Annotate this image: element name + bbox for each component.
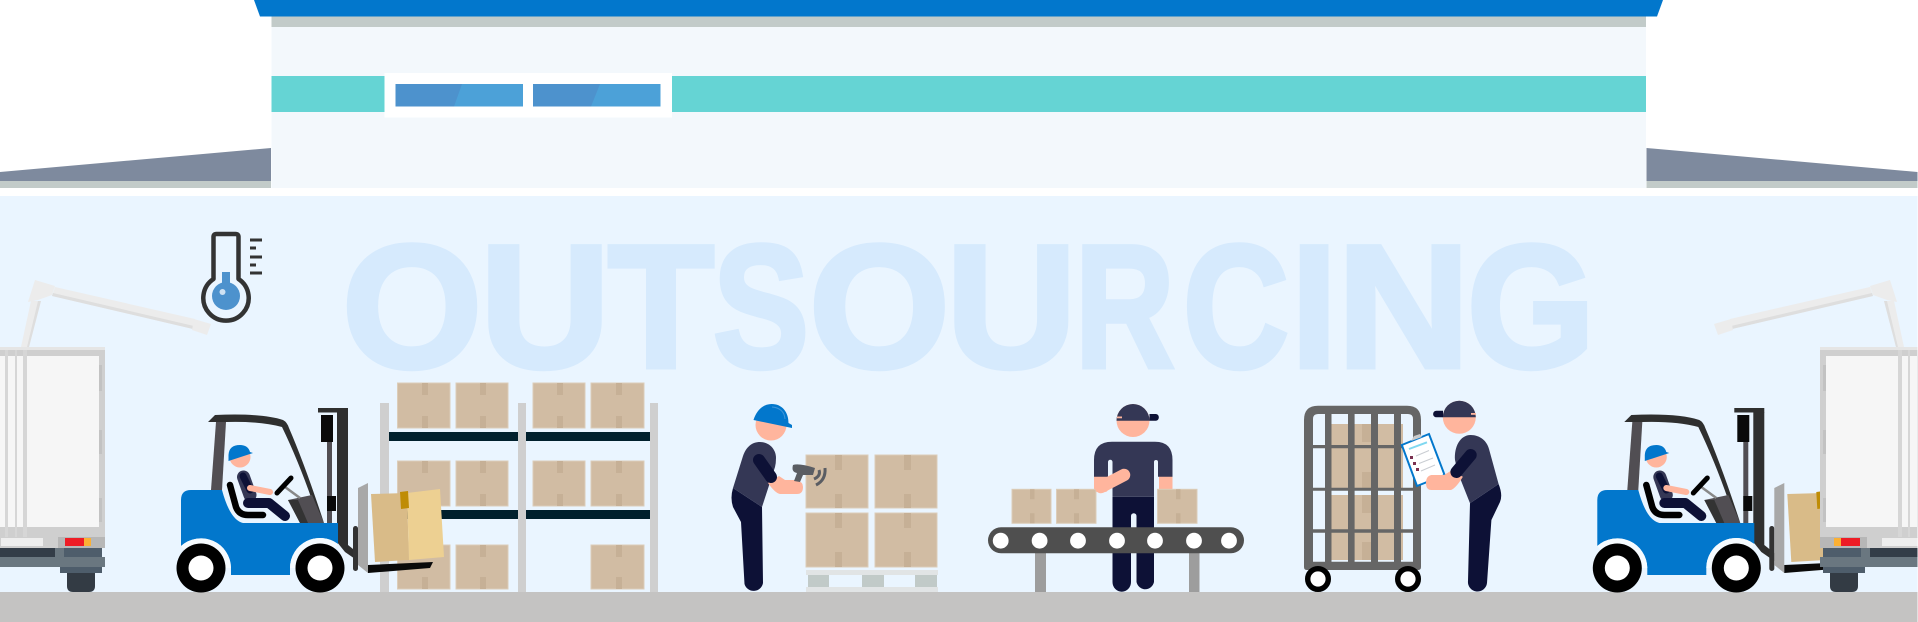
title: OUTSOURCING watermark: C <box>1183 210 1289 404</box>
wooden pallet <box>806 570 938 592</box>
conveyor boxes <box>1012 489 1197 523</box>
title: OUTSOURCING watermark: R <box>1074 210 1174 404</box>
cab frame <box>208 415 324 523</box>
driver <box>228 445 285 516</box>
floor <box>0 592 1918 622</box>
teal stripe left <box>272 76 384 112</box>
title: OUTSOURCING watermark: T <box>608 210 714 404</box>
roll cage trolley <box>1304 406 1421 589</box>
conveyor belt <box>988 527 1244 553</box>
cage wheels <box>1308 569 1418 589</box>
conveyor worker and belt <box>988 404 1244 592</box>
truck box <box>0 347 105 548</box>
conveyor legs <box>1035 553 1200 592</box>
head and cap <box>1433 401 1476 434</box>
truck: right rear view with dock light <box>1714 280 1918 592</box>
title: OUTSOURCING watermark: U <box>946 210 1077 404</box>
arm <box>759 460 803 494</box>
cage boxes <box>1332 424 1403 560</box>
box tape <box>422 383 622 589</box>
storage rack with boxes <box>380 383 658 592</box>
pallet with boxes <box>806 455 938 592</box>
torso <box>733 442 776 507</box>
wheel arches <box>181 538 338 568</box>
worker left arm and head <box>1101 404 1159 487</box>
cage frame <box>1304 406 1421 570</box>
rack uprights <box>380 403 658 592</box>
worker with barcode scanner <box>732 404 803 591</box>
blue roof <box>254 0 1663 16</box>
truck rear lights and bumper <box>0 537 105 592</box>
legs <box>732 488 763 591</box>
page edge <box>1918 188 1919 622</box>
title: OUTSOURCING watermark: G <box>1467 210 1595 404</box>
icon: thermometer <box>203 234 262 321</box>
window right <box>533 84 660 106</box>
dock light arm <box>21 280 211 347</box>
title: OUTSOURCING watermark: O <box>809 210 950 404</box>
pallet boxes <box>806 455 937 567</box>
title: OUTSOURCING watermark: I <box>1290 210 1337 404</box>
pallet box tape <box>835 455 911 567</box>
warehouse interior wall <box>0 196 1918 592</box>
conveyor rollers <box>993 533 1237 549</box>
front and rear wheels <box>176 544 344 592</box>
fascia band <box>272 16 1646 27</box>
seat <box>230 485 263 515</box>
title: OUTSOURCING watermark <box>342 210 1595 404</box>
title: OUTSOURCING watermark: N <box>1337 210 1470 404</box>
rack beams <box>389 432 658 519</box>
forklift body <box>181 490 338 575</box>
head and hard hat <box>754 404 792 440</box>
torso <box>1455 435 1499 503</box>
carried cardboard box <box>371 489 444 562</box>
steering wheel <box>277 478 300 498</box>
truck: left rear view with dock light <box>0 280 211 592</box>
arm <box>1426 455 1471 490</box>
forklift left <box>176 408 444 592</box>
clipboard <box>1402 434 1445 486</box>
teal stripe right <box>672 76 1646 112</box>
forklift right <box>1593 408 1860 592</box>
right side roof <box>1646 148 1918 188</box>
rack boxes <box>398 383 644 589</box>
fork carriage <box>353 483 433 573</box>
legs <box>1468 484 1501 592</box>
worker with clipboard <box>1402 401 1501 592</box>
title: OUTSOURCING watermark: U <box>480 210 610 404</box>
icon: barcode scanner with signal <box>792 464 825 485</box>
window frame <box>384 73 672 118</box>
worker body <box>1094 442 1172 592</box>
title: OUTSOURCING watermark: S <box>713 210 809 404</box>
left side roof <box>0 148 271 188</box>
title: OUTSOURCING watermark: O <box>342 210 482 404</box>
building facade <box>272 27 1646 188</box>
mast <box>318 408 358 561</box>
window left <box>396 84 523 106</box>
